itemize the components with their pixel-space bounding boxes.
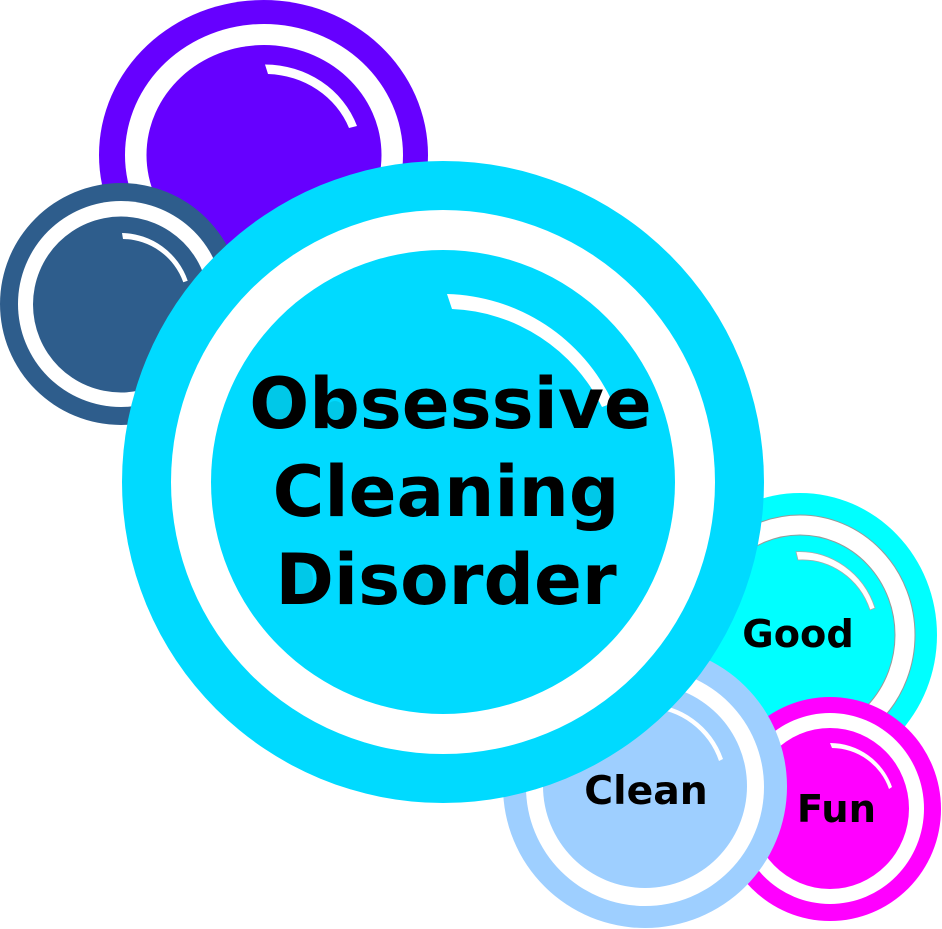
bubble: light blue Clean — [503, 645, 787, 928]
title: Obsessive — [249, 362, 652, 445]
letter counter shading — [262, 383, 604, 601]
title: Disorder — [275, 538, 617, 621]
bubble: steel blue — [0, 183, 242, 425]
label: Fun: Fun — [797, 787, 876, 832]
bubble: main cyan — [122, 161, 764, 803]
title — [249, 362, 652, 621]
bubble: purple — [99, 0, 428, 310]
label: Clean: Clean — [584, 769, 708, 814]
bubble: cyan Good — [663, 493, 937, 777]
title: Cleaning — [273, 450, 619, 533]
label: Good: Good — [742, 612, 854, 657]
bubble: magenta Fun — [719, 697, 941, 921]
